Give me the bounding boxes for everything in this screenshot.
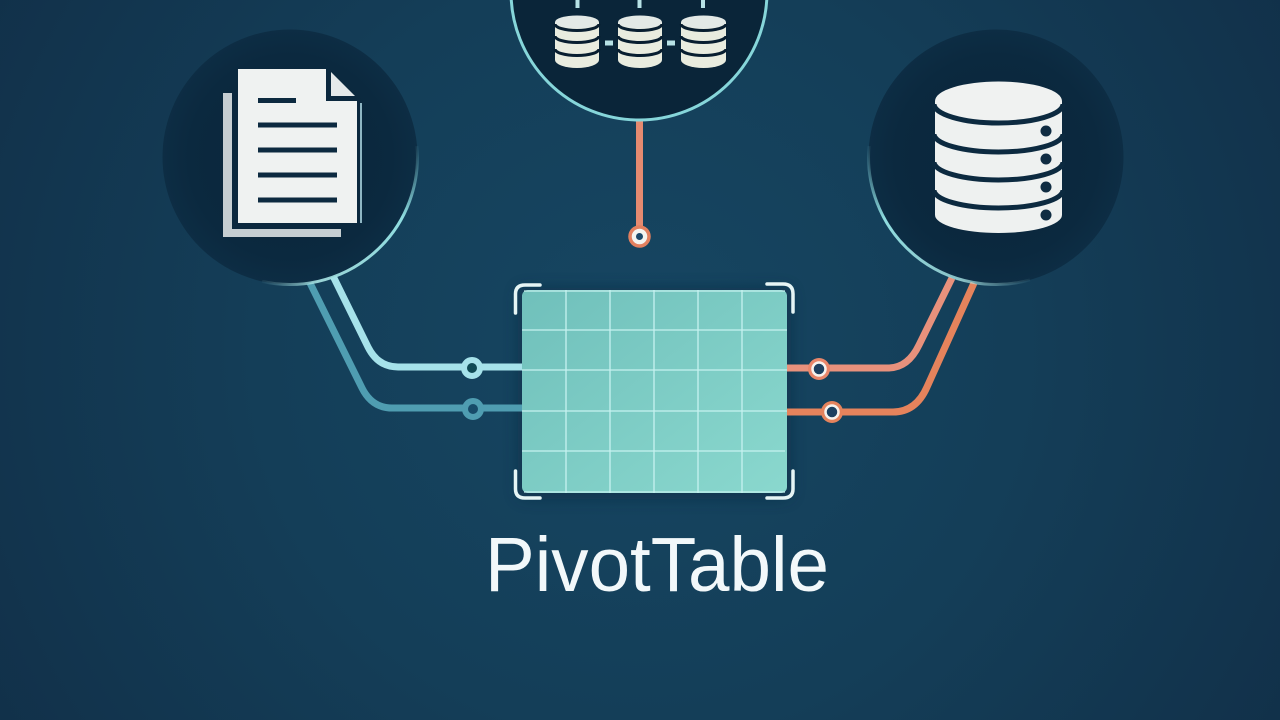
connector: left light line xyxy=(333,276,523,376)
icon: link between databases two and three xyxy=(667,40,675,46)
panel: multiple databases circle xyxy=(511,0,767,120)
connector: left dark line xyxy=(310,283,523,417)
icon: stacked documents xyxy=(223,69,362,237)
title: PivotTable xyxy=(485,522,829,608)
connector: center salmon line xyxy=(630,116,649,246)
corner brackets xyxy=(516,284,793,498)
connector: right orange line xyxy=(786,283,974,423)
rim arc: databases circle xyxy=(511,0,767,120)
icon: database two xyxy=(618,0,662,68)
icon: large database xyxy=(934,82,1063,233)
connector: right light salmon line xyxy=(786,278,952,380)
icon: database three xyxy=(681,0,726,68)
panel: pivot table grid xyxy=(516,284,793,498)
panel: document source circle xyxy=(162,30,418,285)
rim arc: large database circle xyxy=(869,146,1030,285)
icon: link between databases one and two xyxy=(605,40,613,46)
rim arc: document circle xyxy=(262,146,417,285)
icon: database one xyxy=(555,0,599,68)
panel: large database circle xyxy=(868,30,1124,285)
